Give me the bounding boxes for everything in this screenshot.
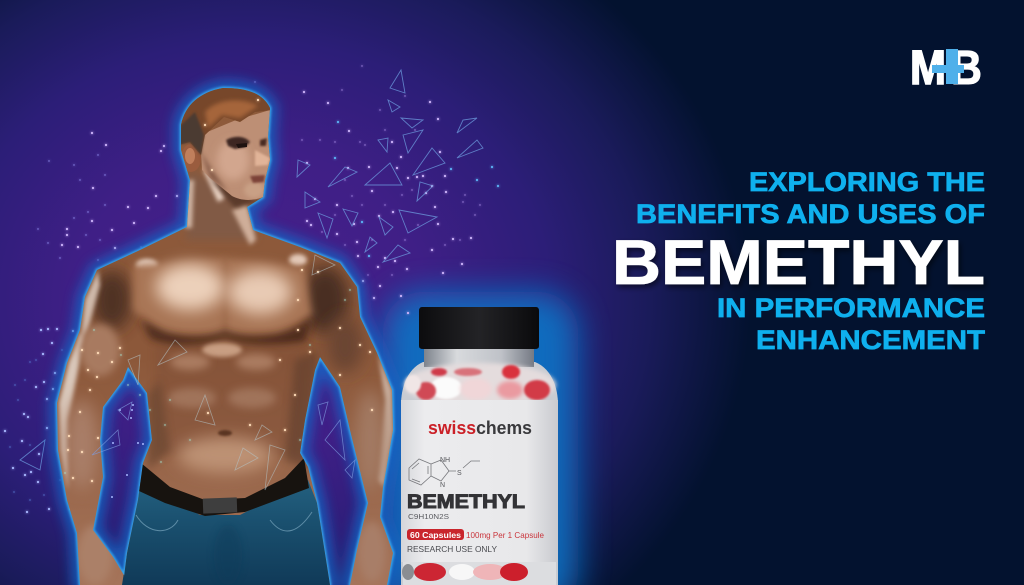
pectorals	[133, 258, 225, 335]
capsules top	[404, 363, 556, 407]
headline line 2: BENEFITS AND USES OF	[636, 199, 985, 229]
capsules bottom	[402, 562, 556, 585]
molecule diagram: N	[440, 482, 445, 489]
under-pec shadow	[140, 318, 312, 346]
chemical formula: C9H10N2S	[408, 512, 449, 521]
logo plus	[932, 49, 964, 84]
purple stars left	[62, 133, 177, 248]
figure rim light	[57, 88, 393, 585]
abs	[168, 404, 304, 452]
purple stars upper right	[304, 92, 471, 313]
face	[200, 110, 270, 200]
body particles	[65, 100, 372, 481]
logo letter B: B	[951, 42, 982, 95]
ear	[181, 144, 201, 172]
neck	[186, 170, 256, 240]
jeans	[122, 480, 332, 585]
molecule diagram: S	[457, 470, 462, 477]
particle field	[5, 66, 498, 512]
belt	[139, 458, 309, 516]
research use note: RESEARCH USE ONLY	[407, 544, 497, 554]
figure outer glow	[57, 88, 393, 585]
bodybuilder figure	[40, 80, 410, 585]
body triangles	[128, 255, 335, 490]
dosage: 100mg Per 1 Capsule	[466, 530, 544, 540]
figure anatomy	[57, 88, 393, 585]
headline line 1: EXPLORING THE	[749, 167, 985, 197]
arms	[59, 332, 84, 490]
stars and triangles in arm gaps	[92, 402, 355, 497]
logo	[910, 42, 982, 95]
logo letter M: M	[910, 42, 946, 95]
bottle cap	[419, 307, 539, 349]
capsule count badge: 60 Capsules	[410, 530, 461, 540]
headline line 3: IN PERFORMANCE	[717, 293, 985, 323]
bottle body	[401, 362, 558, 585]
headline line 4: ENHANCEMENT	[756, 325, 985, 355]
bottle neck	[424, 347, 534, 367]
bottle label	[401, 400, 558, 562]
headline product name: BEMETHYL	[612, 228, 985, 298]
shoulders	[92, 270, 132, 330]
blue stars lower left	[5, 329, 73, 512]
molecule diagram	[409, 457, 480, 489]
molecule diagram: NH	[440, 457, 450, 464]
brand name: swisschems	[428, 417, 532, 438]
bottle glow	[383, 292, 578, 585]
line triangles	[20, 70, 483, 470]
product name: BEMETHYL	[407, 491, 525, 513]
supplement bottle	[401, 307, 558, 585]
headline	[612, 167, 985, 355]
hair	[178, 86, 272, 155]
background	[0, 0, 731, 585]
